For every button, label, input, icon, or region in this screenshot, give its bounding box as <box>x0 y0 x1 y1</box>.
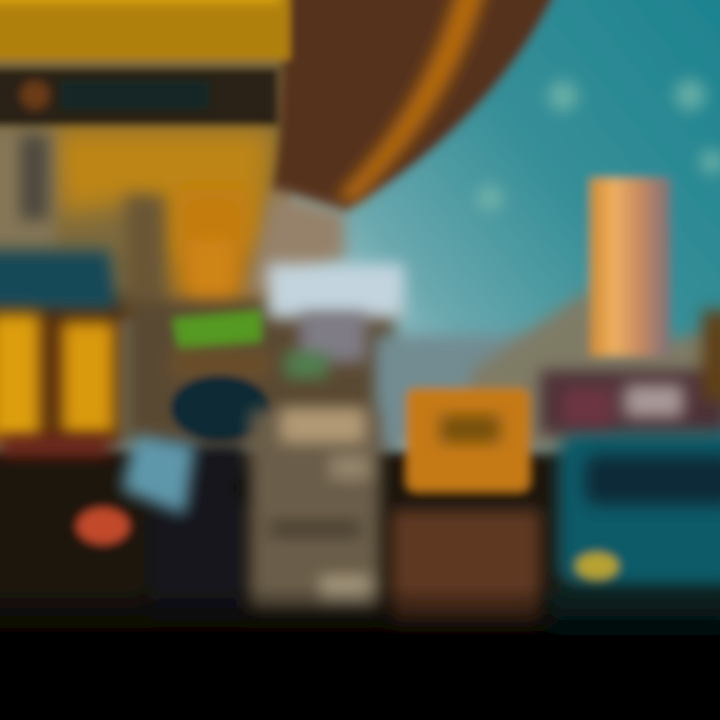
panel: brown dome with orange stripe <box>245 0 565 300</box>
panel: left building wall <box>0 40 290 320</box>
dark body <box>150 445 245 615</box>
panel: grey grid crate <box>250 352 380 610</box>
blue arm <box>122 435 195 515</box>
panel: red object <box>76 507 130 545</box>
panel: floor <box>392 510 540 625</box>
panel: pink roadside objects <box>562 310 720 426</box>
lantern right window <box>62 322 114 434</box>
lantern lower glow <box>0 435 110 457</box>
icon: tower <box>590 178 670 356</box>
panel: street level dark base <box>0 288 720 650</box>
panel: central figure <box>122 310 284 615</box>
panel: sky stars <box>477 80 720 211</box>
lantern body <box>0 298 125 448</box>
car headlight <box>575 552 619 580</box>
dark hand <box>232 470 284 506</box>
tan head band <box>170 350 270 378</box>
panel: white cloud <box>268 264 404 362</box>
panel: bottom fade to black <box>0 585 720 645</box>
panel: top gold band <box>0 0 290 60</box>
lantern teal roof <box>0 250 118 310</box>
panel: orange bus <box>406 388 530 492</box>
panel: lantern <box>0 250 125 457</box>
panel: bottom black band <box>0 644 720 720</box>
panel: dark sign band <box>0 68 278 126</box>
lantern left window <box>0 314 40 439</box>
dark teal face <box>170 375 270 441</box>
panel: teal car <box>550 432 720 640</box>
green hat <box>172 310 262 350</box>
